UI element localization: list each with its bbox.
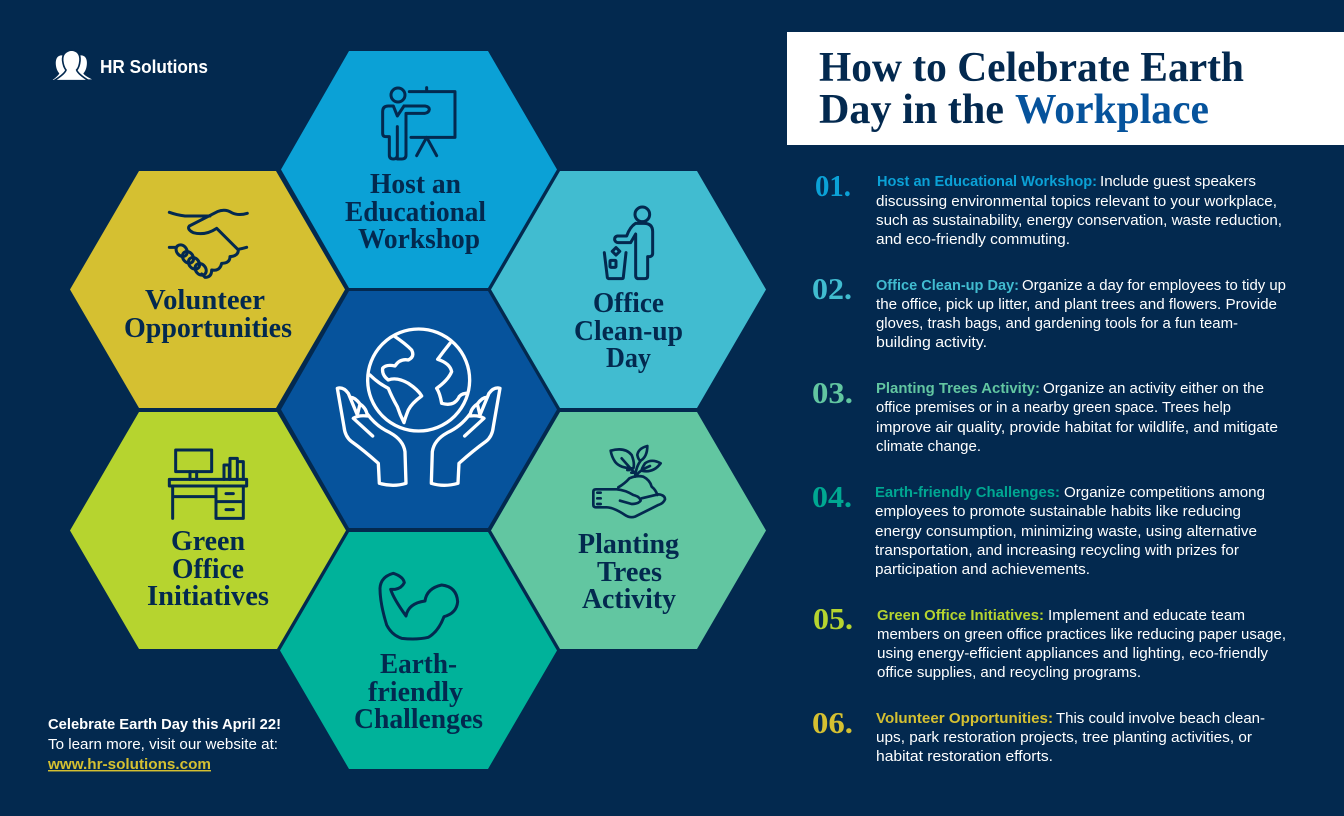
item 05	[813, 601, 1286, 681]
text: Earth-friendly Challenges: Organize competitions among	[1064, 485, 1265, 501]
text: Earth-friendly Challenges	[875, 485, 1265, 578]
text: Planting Trees Activity: office premises or in a nearby green space. Trees help	[876, 400, 1231, 416]
title banner	[787, 32, 1344, 145]
logo text: HR Solutions	[100, 56, 208, 77]
text: Office Clean-up Day: Organize a day for employees to tidy up	[1022, 278, 1286, 294]
item 02	[812, 271, 1286, 351]
hexagon	[280, 532, 557, 769]
hexagon	[491, 171, 766, 408]
text: Volunteer Opportunities: Volunteer Opportunities:	[876, 711, 1053, 727]
number 05: 05.	[813, 601, 853, 636]
text: Green Office Initiatives: using energy-efficient appliances and lighting, eco-friendly	[877, 646, 1269, 662]
hexagon	[281, 291, 557, 528]
banner background	[787, 32, 1344, 145]
label: Host an	[370, 169, 461, 200]
icon: hands holding globe	[337, 329, 500, 485]
number 03: 03.	[812, 375, 853, 410]
label: Earth-	[380, 649, 457, 680]
text: Planting Trees Activity	[876, 381, 1278, 455]
item 03	[812, 375, 1278, 455]
label	[124, 285, 292, 344]
text: Planting Trees Activity: climate change.	[876, 439, 981, 455]
label	[354, 649, 483, 735]
label: Trees	[597, 557, 662, 588]
panel: Green Office Initiatives hexagon	[70, 412, 346, 649]
panel: centre hexagon	[281, 291, 557, 528]
label: Opportunities	[124, 313, 292, 344]
icon: hand holding seedling	[593, 446, 665, 517]
hexagon	[281, 51, 557, 288]
label: Workshop	[358, 224, 480, 255]
hexagon	[491, 412, 766, 649]
icon: people	[53, 50, 92, 81]
number 02: 02.	[812, 271, 852, 306]
text: Office Clean-up Day: the office, pick up litter, and plant trees and flowers. Provide	[876, 297, 1277, 313]
title text	[819, 45, 1244, 133]
number 06: 06.	[812, 705, 853, 740]
text: Office Clean-up Day: building activity.	[876, 335, 987, 351]
text: Host an Educational Workshop	[876, 174, 1282, 248]
label	[578, 529, 679, 615]
text: Volunteer Opportunities: This could involve beach clean-	[1056, 711, 1265, 727]
text: Host an Educational Workshop: Host an Educational Workshop:	[877, 174, 1097, 190]
text: Office Clean-up Day: gloves, trash bags, and gardening tools for a fun team-	[876, 316, 1238, 332]
label: Challenges	[354, 704, 483, 735]
number 04: 04.	[812, 479, 852, 514]
text: Green Office Initiatives: office supplies, and recycling programs.	[877, 665, 1141, 681]
text: Earth-friendly Challenges: participation and achievements.	[875, 562, 1090, 578]
text: Green Office Initiatives: Green Office Initiatives:	[877, 608, 1044, 624]
title text: How to Celebrate Earth	[819, 45, 1244, 91]
icon: flexed arm	[380, 573, 458, 639]
footer call to action: www.hr-solutions.com	[47, 757, 211, 773]
hexagon	[70, 412, 346, 649]
text: Earth-friendly Challenges: transportation, and increasing recycling with prizes for	[875, 543, 1239, 559]
text: Green Office Initiatives: Implement and educate team	[1048, 608, 1245, 624]
text: Green Office Initiatives	[877, 608, 1286, 681]
text: Office Clean-up Day	[876, 278, 1286, 351]
item 04	[812, 479, 1265, 578]
text: Earth-friendly Challenges: energy consumption, minimizing waste, using alternative	[875, 524, 1257, 540]
text: Earth-friendly Challenges: Earth-friendly Challenges:	[875, 485, 1060, 501]
text: Office Clean-up Day: Office Clean-up Day:	[876, 278, 1019, 294]
icon: handshake	[169, 210, 247, 277]
icon: presenter at board	[383, 88, 455, 159]
text: Earth-friendly Challenges: employees to promote sustainable habits like reducing	[875, 504, 1241, 520]
label: Clean-up	[574, 316, 683, 347]
label: Green	[171, 526, 245, 557]
text: Host an Educational Workshop: Include guest speakers	[1100, 174, 1256, 190]
label	[345, 169, 486, 255]
text: Host an Educational Workshop: and eco-friendly commuting.	[876, 232, 1070, 248]
icon: office desk	[169, 450, 247, 518]
text: Planting Trees Activity: Organize an activity either on the	[1043, 381, 1264, 397]
footer call to action	[47, 717, 281, 773]
footer call to action: Celebrate Earth Day this April 22!	[48, 717, 281, 733]
text: Volunteer Opportunities: ups, park restoration projects, tree planting activities, or	[876, 730, 1252, 746]
panel: Earth-friendly Challenges hexagon	[280, 532, 557, 769]
item 01	[815, 168, 1282, 248]
hexagon	[70, 171, 345, 408]
title text: Workplace	[1015, 87, 1209, 133]
panel: Planting Trees Activity hexagon	[491, 412, 766, 649]
panel: Office Clean-up Day hexagon	[491, 171, 766, 408]
label: Office	[172, 554, 244, 585]
text: Planting Trees Activity: improve air quality, provide habitat for wildlife, and mitigate	[876, 420, 1278, 436]
label: friendly	[368, 677, 463, 708]
label: Day	[606, 343, 651, 374]
text: Volunteer Opportunities: habitat restoration efforts.	[876, 749, 1053, 765]
panel: Host an Educational Workshop hexagon	[281, 51, 557, 288]
text: Green Office Initiatives: members on green office practices like reducing paper usage,	[877, 627, 1286, 643]
label: Educational	[345, 197, 486, 228]
label: Initiatives	[147, 581, 269, 612]
text: Host an Educational Workshop: discussing environmental topics relevant to your workplace,	[876, 194, 1277, 210]
label	[147, 526, 269, 612]
title text: Day in the	[819, 87, 1004, 133]
panel: Volunteer Opportunities hexagon	[70, 171, 345, 408]
number 01: 01.	[815, 168, 851, 203]
item 06	[812, 705, 1265, 765]
label	[574, 288, 683, 374]
logo: HR Solutions	[53, 50, 208, 81]
text: Planting Trees Activity: Planting Trees Activity:	[876, 381, 1040, 397]
icon: person using trash bin	[604, 207, 653, 279]
footer call to action: To learn more, visit our website at:	[48, 737, 278, 753]
label: Planting	[578, 529, 679, 560]
text: Host an Educational Workshop: such as sustainability, energy conservation, waste reduction,	[876, 213, 1282, 229]
label: Office	[593, 288, 664, 319]
label: Volunteer	[145, 285, 265, 316]
text: Volunteer Opportunities	[876, 711, 1265, 765]
label: Activity	[582, 584, 676, 615]
